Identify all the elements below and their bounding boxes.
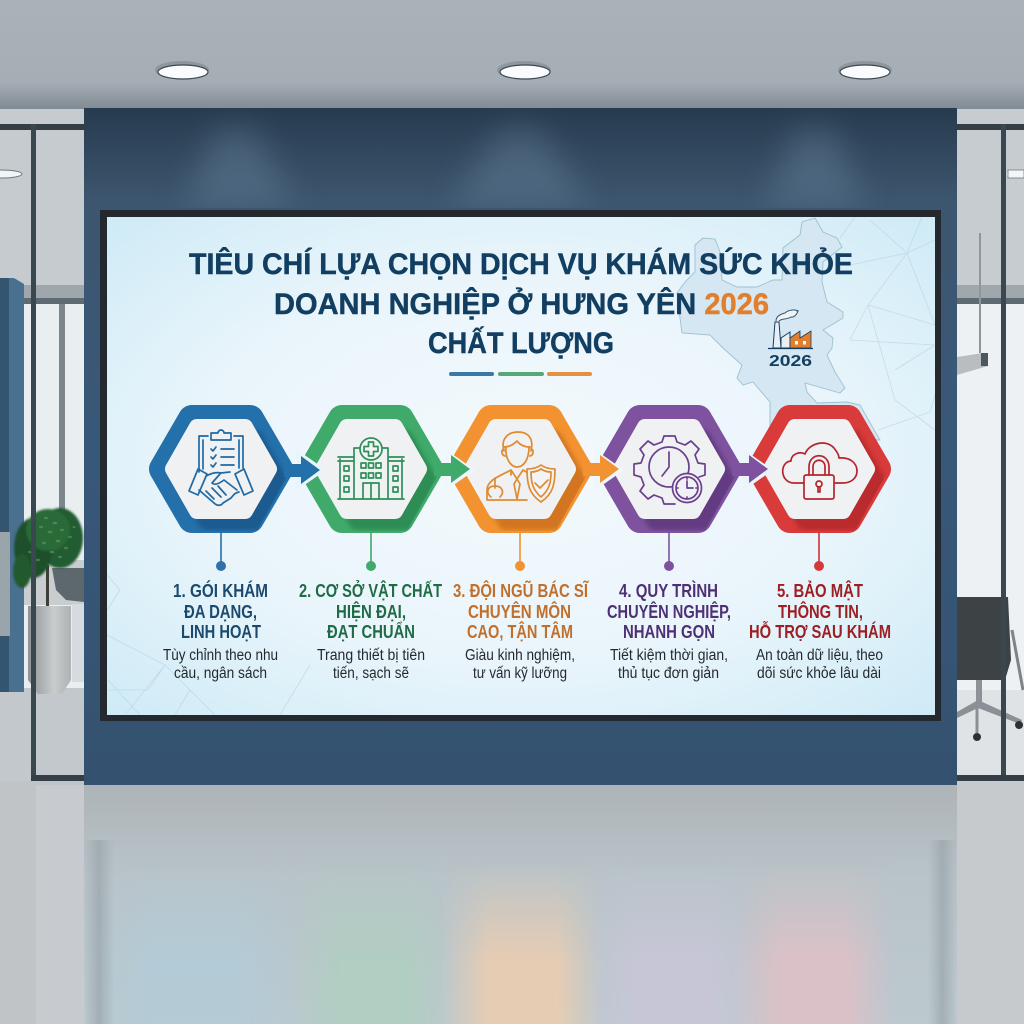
step 5 text: THÔNG TIN, xyxy=(778,601,863,622)
step 5 text: HỖ TRỢ SAU KHÁM xyxy=(749,621,891,642)
connector pins xyxy=(216,533,824,571)
icon: factory 2026 xyxy=(768,310,813,370)
step 4 text: NHANH GỌN xyxy=(623,622,715,642)
step 2 text xyxy=(299,580,442,682)
step 2 text: HIỆN ĐẠI, xyxy=(336,601,406,622)
title: TIÊU CHÍ LỰA CHỌN DỊCH VỤ KHÁM SỨC KHỎE xyxy=(189,247,853,281)
step 4 text: 4. QUY TRÌNH xyxy=(619,580,718,601)
step 4 hexagon xyxy=(611,419,727,522)
step 5 text: dõi sức khỏe lâu dài xyxy=(757,665,881,682)
arrow: step 1 to 2 xyxy=(284,449,326,491)
step 3 text: 3. ĐỘI NGŨ BÁC SĨ xyxy=(453,580,589,601)
floor xyxy=(0,781,1024,1024)
arrow: step 2 to 3 xyxy=(434,449,475,491)
step 2 text: ĐẠT CHUẨN xyxy=(327,621,415,642)
screen frame xyxy=(100,210,941,721)
step 4 text: Tiết kiệm thời gian, xyxy=(610,647,728,664)
office chair xyxy=(957,597,1023,741)
plant foliage xyxy=(13,508,83,588)
step 5 hexagon xyxy=(761,419,877,522)
step 1 text xyxy=(163,580,278,682)
step 2 hexagon xyxy=(313,419,429,522)
title underline accents xyxy=(449,372,592,376)
title: DOANH NGHIỆP Ở HƯNG YÊN 2026 xyxy=(274,287,769,321)
icon: clipboard and handshake xyxy=(189,430,253,505)
screen background xyxy=(107,217,935,715)
blue feature wall xyxy=(84,108,957,785)
step 1 hexagon xyxy=(163,419,279,522)
right glass partition and interior xyxy=(957,109,1024,781)
title: CHẤT LƯỢNG xyxy=(428,326,614,360)
step 2 text: tiến, sạch sẽ xyxy=(333,665,409,682)
title xyxy=(189,247,853,360)
arrow: step 4 to 5 xyxy=(732,449,773,491)
step 4 text: thủ tục đơn giản xyxy=(618,665,719,682)
step 4 text: CHUYÊN NGHIỆP, xyxy=(607,601,731,622)
desk behind plant xyxy=(52,568,84,602)
step 1 text: ĐA DẠNG, xyxy=(184,602,257,622)
step 1 text: Tùy chỉnh theo nhu xyxy=(163,647,278,664)
screen panel xyxy=(100,210,941,721)
step 4 text xyxy=(607,580,731,682)
step 2 text: Trang thiết bị tiên xyxy=(317,647,425,664)
map of Hung Yen xyxy=(677,218,880,440)
icon: cloud with padlock xyxy=(783,443,857,499)
ceiling xyxy=(0,0,1024,109)
step 5 text: 5. BẢO MẬT xyxy=(777,580,863,601)
icon: doctor with shield xyxy=(487,432,555,502)
step 3 text: CHUYÊN MÔN xyxy=(468,601,571,622)
network lines xyxy=(107,217,935,715)
icon: gear with clocks xyxy=(634,436,705,504)
step 3 hexagon xyxy=(462,419,578,522)
arrow: step 3 to 4 xyxy=(583,449,624,491)
step 5 text xyxy=(749,580,891,682)
icon: hospital xyxy=(338,438,404,499)
step 2 text: 2. CƠ SỞ VẬT CHẤT xyxy=(299,580,442,601)
step 3 text xyxy=(453,580,589,682)
step 3 text: tư vấn kỹ lưỡng xyxy=(473,665,567,682)
step 5 text: An toàn dữ liệu, theo xyxy=(756,647,883,664)
left glass partition and interior xyxy=(0,109,84,781)
step 1 text: 1. GÓI KHÁM xyxy=(173,580,268,601)
planter pot xyxy=(28,606,71,694)
step 1 text: LINH HOẠT xyxy=(181,622,261,642)
step 3 text: CAO, TẬN TÂM xyxy=(467,621,573,642)
step 1 text: cầu, ngân sách xyxy=(174,665,267,682)
step 3 text: Giàu kinh nghiệm, xyxy=(465,647,575,664)
ceiling lights xyxy=(155,61,892,79)
icon: factory 2026: 2026 xyxy=(769,353,812,370)
